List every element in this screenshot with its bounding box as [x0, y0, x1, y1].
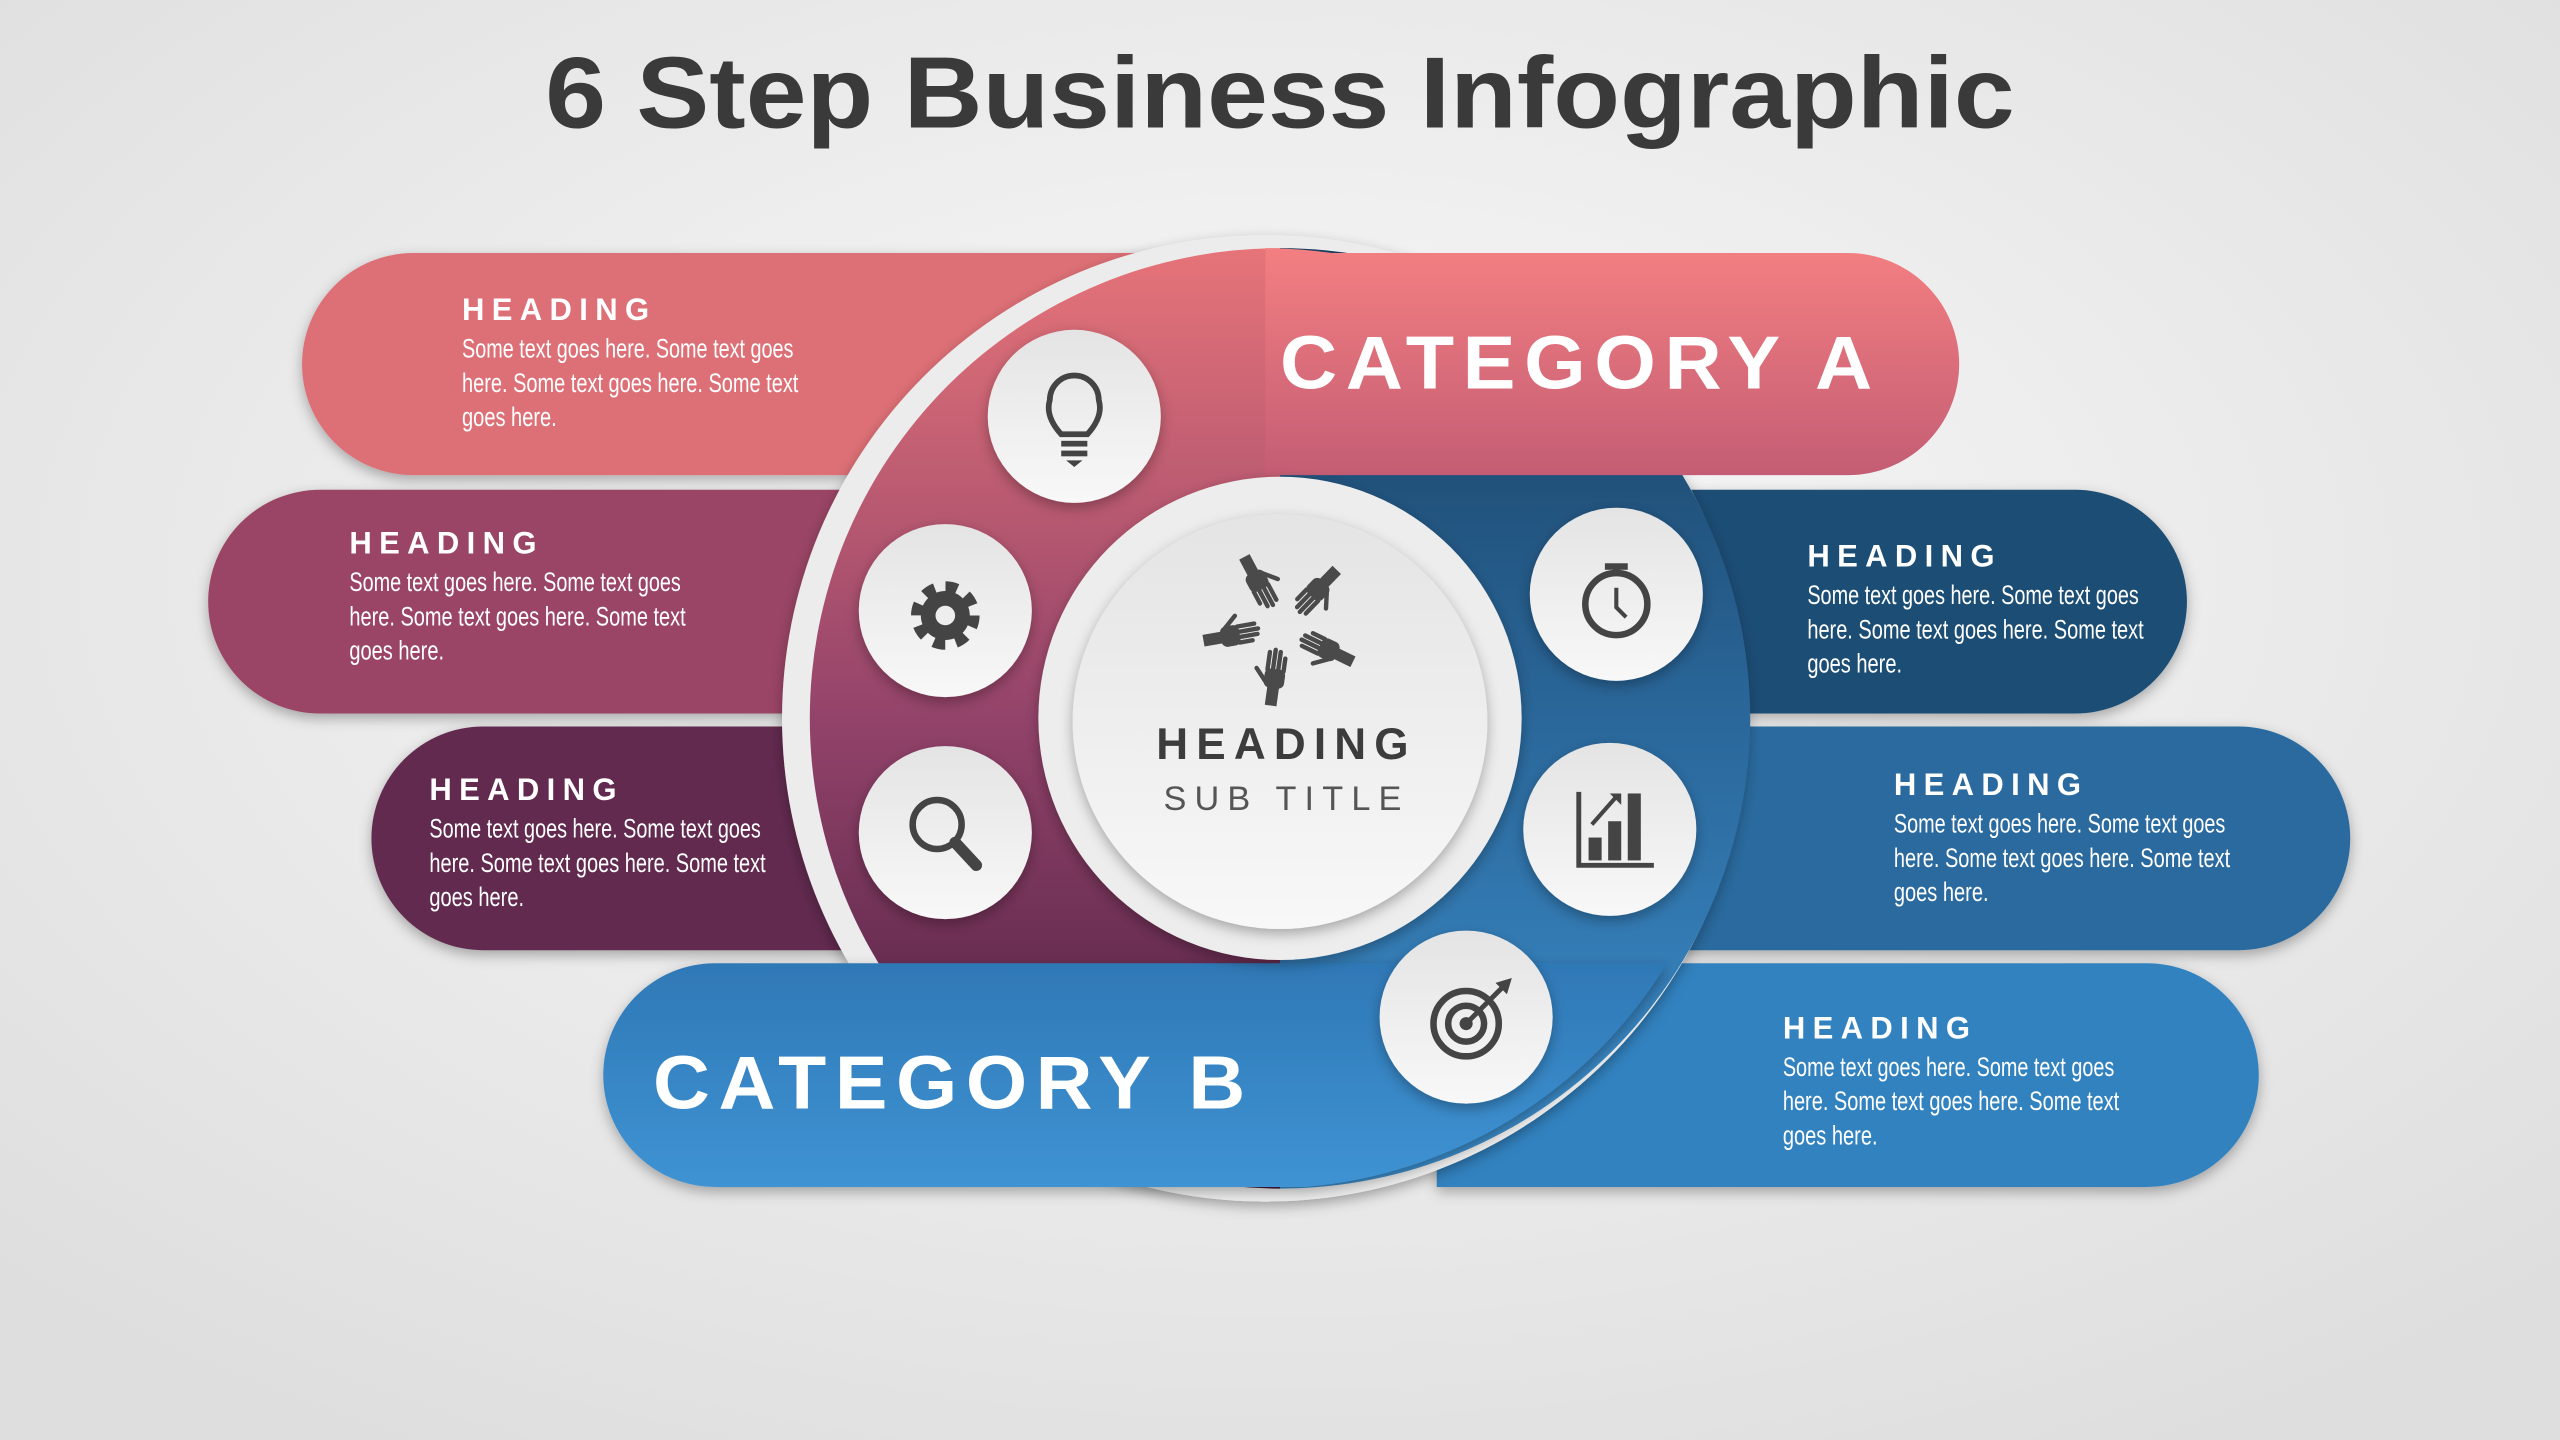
text: left 3: HEADING — [429, 772, 624, 807]
big circle — [782, 235, 1750, 1202]
text: left 2: Some text goes here. Some text goes — [349, 567, 681, 597]
text: left 1: here. Some text goes here. Some text — [462, 368, 799, 398]
pill: right 6 — [1437, 963, 2259, 1187]
text: right 6: here. Some text goes here. Some text — [1783, 1086, 2120, 1116]
icon: search — [859, 746, 1032, 919]
text: right 4: HEADING — [1807, 539, 2002, 574]
text: left 2: HEADING — [349, 525, 544, 560]
category A band: CATEGORY A — [1280, 321, 1881, 405]
pill: right 4 — [1551, 490, 2187, 713]
icon: bulb — [988, 330, 1161, 503]
text: right 6: HEADING — [1783, 1010, 1977, 1045]
text: right 6 — [1783, 1010, 2120, 1150]
category B band: CATEGORY B — [653, 1041, 1254, 1125]
text: left 2: here. Some text goes here. Some text — [349, 601, 686, 631]
text: left 3: Some text goes here. Some text goes — [429, 814, 761, 844]
text: left 2: goes here. — [349, 636, 444, 666]
text: right 5: Some text goes here. Some text goes — [1894, 809, 2225, 839]
text: right 5: HEADING — [1894, 767, 2088, 802]
pill: left 1 — [302, 253, 1176, 475]
text: right 5: here. Some text goes here. Some text — [1894, 843, 2231, 873]
text: right 5: goes here. — [1894, 877, 1989, 907]
text: right 4 — [1807, 539, 2144, 679]
text: right 4: Some text goes here. Some text goes — [1807, 580, 2139, 610]
center heading: HEADING — [1156, 720, 1417, 769]
text: left 1: goes here. — [462, 402, 557, 432]
icon: hands — [1200, 548, 1357, 707]
pill: left 2 — [208, 490, 1012, 713]
pill: right 5 — [1551, 727, 2350, 950]
text: right 6: Some text goes here. Some text goes — [1783, 1052, 2114, 1082]
text: right 4: goes here. — [1807, 649, 1902, 679]
text: left 1: HEADING — [462, 292, 656, 327]
icon: gear — [859, 524, 1032, 697]
icon: target — [1380, 931, 1553, 1104]
center circle — [1038, 477, 1522, 960]
text: left 2 — [349, 525, 686, 666]
text: right 5 — [1894, 767, 2231, 907]
text: right 4: here. Some text goes here. Some text — [1807, 614, 2144, 644]
text: left 1 — [462, 292, 799, 432]
pill: left 3 — [371, 727, 1012, 950]
center subtitle: SUB TITLE — [1163, 780, 1410, 818]
text: left 3 — [429, 772, 766, 912]
icon: chart — [1523, 743, 1696, 916]
text: left 3: goes here. — [429, 882, 524, 912]
title: 6 Step Business Infographic — [545, 36, 2015, 149]
text: left 3: here. Some text goes here. Some text — [429, 848, 766, 878]
category A band — [1265, 248, 1959, 475]
text: left 1: Some text goes here. Some text goes — [462, 334, 793, 364]
text: right 6: goes here. — [1783, 1120, 1878, 1150]
category B band — [603, 963, 1667, 1187]
icon: timer — [1530, 508, 1703, 681]
